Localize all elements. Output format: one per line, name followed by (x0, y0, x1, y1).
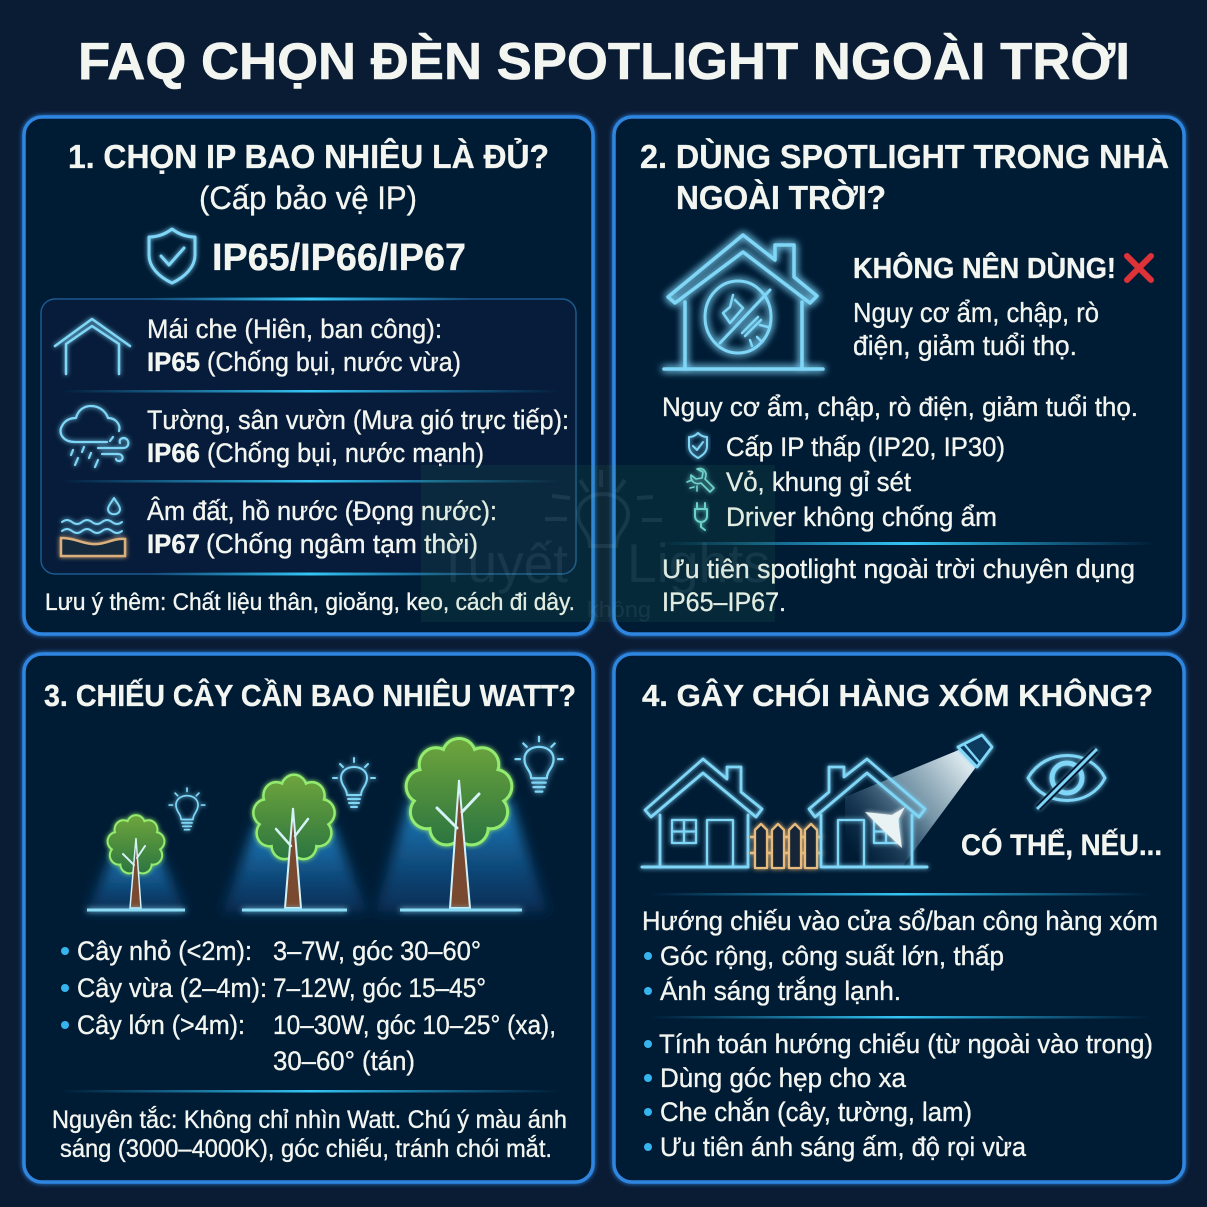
icon: water and ground (61, 498, 125, 556)
row: in-ground text: Âm đất, hồ nước (Đọng nước): (147, 495, 497, 526)
row: shelter text: (Chống bụi, nước vừa) (207, 347, 461, 377)
panel 1 heading: 1. CHỌN IP BAO NHIÊU LÀ ĐỦ? (68, 138, 549, 175)
icon: small bulb (169, 788, 205, 830)
recommendation: Ưu tiên spotlight ngoài trời chuyên dụng (662, 554, 1135, 584)
glare causes: Ánh sáng trắng lạnh. (660, 975, 901, 1006)
panel: 2. indoor spotlight outdoors (614, 117, 1184, 634)
tree wattage list: 30–60° (tán) (273, 1046, 415, 1076)
principle note: Nguyên tắc: Không chỉ nhìn Watt. Chú ý màu ánh (52, 1105, 567, 1134)
tree wattage list: 3–7W, góc 30–60° (273, 936, 481, 966)
reason: low IP: Cấp IP thấp (IP20, IP30) (726, 432, 1005, 462)
light beam (845, 749, 976, 867)
illustration: houses, fence and spotlight (642, 735, 1105, 868)
verdict: CÓ THỂ, NẾU... (961, 828, 1162, 862)
tree wattage list: Cây nhỏ (<2m): (77, 936, 252, 966)
panel: 4. glare for neighbours (614, 654, 1184, 1182)
warning text: điện, giảm tuổi thọ. (853, 330, 1077, 361)
row: in-ground text: (Chống ngâm tạm thời) (206, 529, 478, 559)
reason: driver: Driver không chống ẩm (726, 502, 997, 532)
icon: plug (695, 503, 707, 530)
reason: rust: Vỏ, khung gỉ sét (726, 467, 911, 497)
tree wattage list (61, 936, 556, 1076)
icon: red cross (1127, 256, 1151, 280)
left house (642, 759, 762, 867)
panel: 1. IP rating (24, 117, 593, 634)
light cones (86, 800, 548, 912)
tree wattage list: Cây vừa (2–4m): (77, 973, 267, 1003)
recommended IP ratings: IP65/IP66/IP67 (212, 237, 466, 279)
icon: spotlight lamp (958, 735, 992, 767)
icon: rusty wrench (687, 469, 714, 492)
warning heading: KHÔNG NÊN DÙNG! (853, 251, 1116, 285)
panel 2 heading (640, 138, 1169, 216)
icon: crossed-out eye (1028, 750, 1105, 808)
watermark: Lights (627, 532, 770, 594)
panel 1 subheading: (Cấp bảo vệ IP) (199, 180, 417, 216)
watermark (421, 465, 775, 622)
warning text: Nguy cơ ẩm, chập, rò (853, 297, 1099, 328)
tree wattage list: 10–30W, góc 10–25° (xa), (273, 1010, 556, 1040)
fence (750, 824, 822, 868)
icon: medium bulb (333, 758, 375, 807)
right house (809, 759, 927, 867)
icon: roof shelter (55, 319, 130, 374)
chart: three trees with lamps (86, 737, 563, 912)
row: shelter text: Mái che (Hiên, ban công): (147, 314, 442, 344)
tree wattage list: 7–12W, góc 15–45° (273, 973, 486, 1003)
icon: small shield (689, 433, 707, 458)
title: FAQ CHỌN ĐÈN SPOTLIGHT NGOÀI TRỜI (78, 33, 1130, 91)
panel 2 heading: 2. DÙNG SPOTLIGHT TRONG NHÀ (640, 138, 1169, 175)
glare fixes: Ưu tiên ánh sáng ấm, độ rọi vừa (660, 1132, 1027, 1162)
principle note (52, 1105, 567, 1163)
panel: environments list (41, 298, 576, 576)
watermark: Tuyết (437, 532, 568, 594)
medium tree (242, 775, 347, 912)
row: in-ground text (147, 495, 497, 559)
row: shelter text: IP65 (147, 347, 200, 377)
note: Lưu ý thêm: Chất liệu thân, gioăng, keo, cách đi dây. (45, 589, 575, 616)
row: shelter text (147, 314, 461, 377)
warning text (853, 297, 1099, 361)
panel 2 heading: NGOÀI TRỜI? (676, 179, 886, 216)
row: in-ground text: IP67 (147, 529, 200, 559)
large tree (400, 738, 522, 912)
principle note: sáng (3000–4000K), góc chiếu, tránh chói mắt. (60, 1134, 552, 1163)
row: garden text: (Chống bụi, nước mạnh) (207, 438, 484, 468)
panel: 3. watts for trees (24, 654, 593, 1182)
glare causes: Hướng chiếu vào cửa sổ/ban công hàng xóm (642, 906, 1158, 936)
recommendation (662, 554, 1135, 617)
row: garden text: Tường, sân vườn (Mưa gió trực tiếp): (147, 405, 569, 435)
small tree (87, 815, 185, 912)
glare fixes: Dùng góc hẹp cho xa (660, 1063, 907, 1093)
icon: rain and wind cloud (61, 406, 128, 467)
glare fixes: Tính toán hướng chiếu (từ ngoài vào trong) (659, 1029, 1153, 1059)
glare causes: Góc rộng, công suất lớn, thấp (660, 941, 1004, 971)
glare fixes (644, 1029, 1153, 1162)
glare causes (642, 906, 1158, 1006)
row: garden text (147, 405, 569, 468)
risk summary: Nguy cơ ẩm, chập, rò điện, giảm tuổi thọ. (662, 392, 1138, 422)
icon: shield (149, 229, 195, 283)
panel 3 heading: 3. CHIẾU CÂY CẦN BAO NHIÊU WATT? (44, 677, 576, 713)
row: garden text: IP66 (147, 438, 200, 468)
recommendation: IP65–IP67. (662, 587, 786, 617)
tree wattage list: Cây lớn (>4m): (77, 1010, 245, 1040)
watermark: không (587, 597, 651, 622)
glare spot on window (865, 807, 905, 848)
icon: house with forbidden lamp (664, 235, 823, 369)
panel 4 heading: 4. GÂY CHÓI HÀNG XÓM KHÔNG? (642, 677, 1153, 713)
icon: large bulb (515, 737, 563, 792)
glare fixes: Che chắn (cây, tường, lam) (660, 1096, 972, 1127)
